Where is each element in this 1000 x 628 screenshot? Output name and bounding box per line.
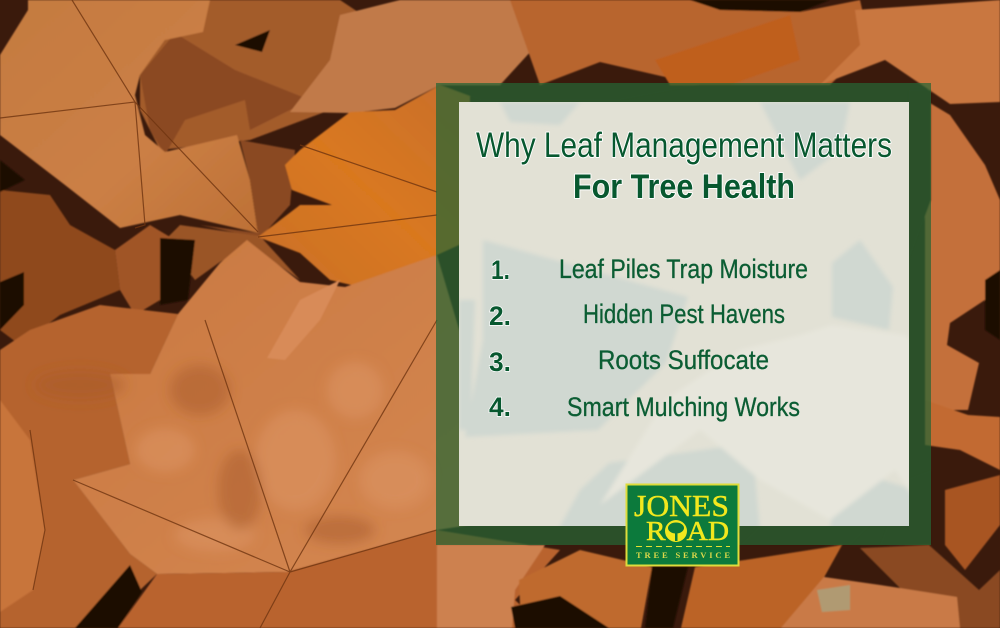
background leaf: bottom tan <box>437 545 545 628</box>
background leaf: top left large <box>0 0 258 233</box>
background leaf: upper brown cluster <box>140 0 400 150</box>
background leaf: bright orange <box>258 85 470 287</box>
background leaf: lower left <box>0 305 178 628</box>
panel: dark green translucent frame <box>436 83 931 545</box>
background leaf: top right pale <box>820 0 1000 104</box>
panel: pale translucent card <box>459 102 929 530</box>
list item 2 <box>489 299 785 331</box>
background leaf: top centre right <box>510 0 870 85</box>
list item 2: Hidden Pest Havens <box>583 299 785 329</box>
list item 4: Smart Mulching Works <box>567 392 800 422</box>
icon: tree in circle <box>665 520 687 542</box>
logo: Jones Road Tree Service: TREE SERVICE <box>636 550 730 560</box>
numbered list <box>489 254 808 422</box>
background leaf: centre mottling <box>35 362 430 551</box>
background leaf: left middle dark brown <box>0 190 120 345</box>
list item 2: 2. <box>489 301 511 331</box>
list item 3 <box>489 345 769 377</box>
title: Why Leaf Management Matters <box>476 126 892 165</box>
logo: Jones Road Tree Service: JONES <box>634 488 729 523</box>
logo: Jones Road Tree Service <box>626 484 738 566</box>
background: shadows under frame <box>440 85 931 545</box>
background leaf: bottom right group <box>519 550 652 628</box>
background leaf: right side <box>925 100 1000 410</box>
list item 4: 4. <box>489 392 511 422</box>
list item 1 <box>491 254 808 285</box>
list item 3: Roots Suffocate <box>598 345 769 375</box>
list item 1: 1. <box>491 255 510 285</box>
title <box>476 126 892 206</box>
list item 4 <box>489 392 800 422</box>
background leaf: centre large <box>73 240 480 574</box>
list item 1: Leaf Piles Trap Moisture <box>559 254 808 284</box>
background leaf: bottom centre <box>118 530 560 628</box>
background leaf: top centre pale <box>290 0 532 113</box>
title: For Tree Health <box>573 168 795 206</box>
logo: Jones Road Tree Service: ROAD <box>646 516 729 546</box>
list item 3: 3. <box>489 347 511 377</box>
background leaf: brown middle <box>200 140 295 238</box>
background: leaf veins <box>0 0 437 628</box>
background leaf: folded piece <box>267 280 340 360</box>
